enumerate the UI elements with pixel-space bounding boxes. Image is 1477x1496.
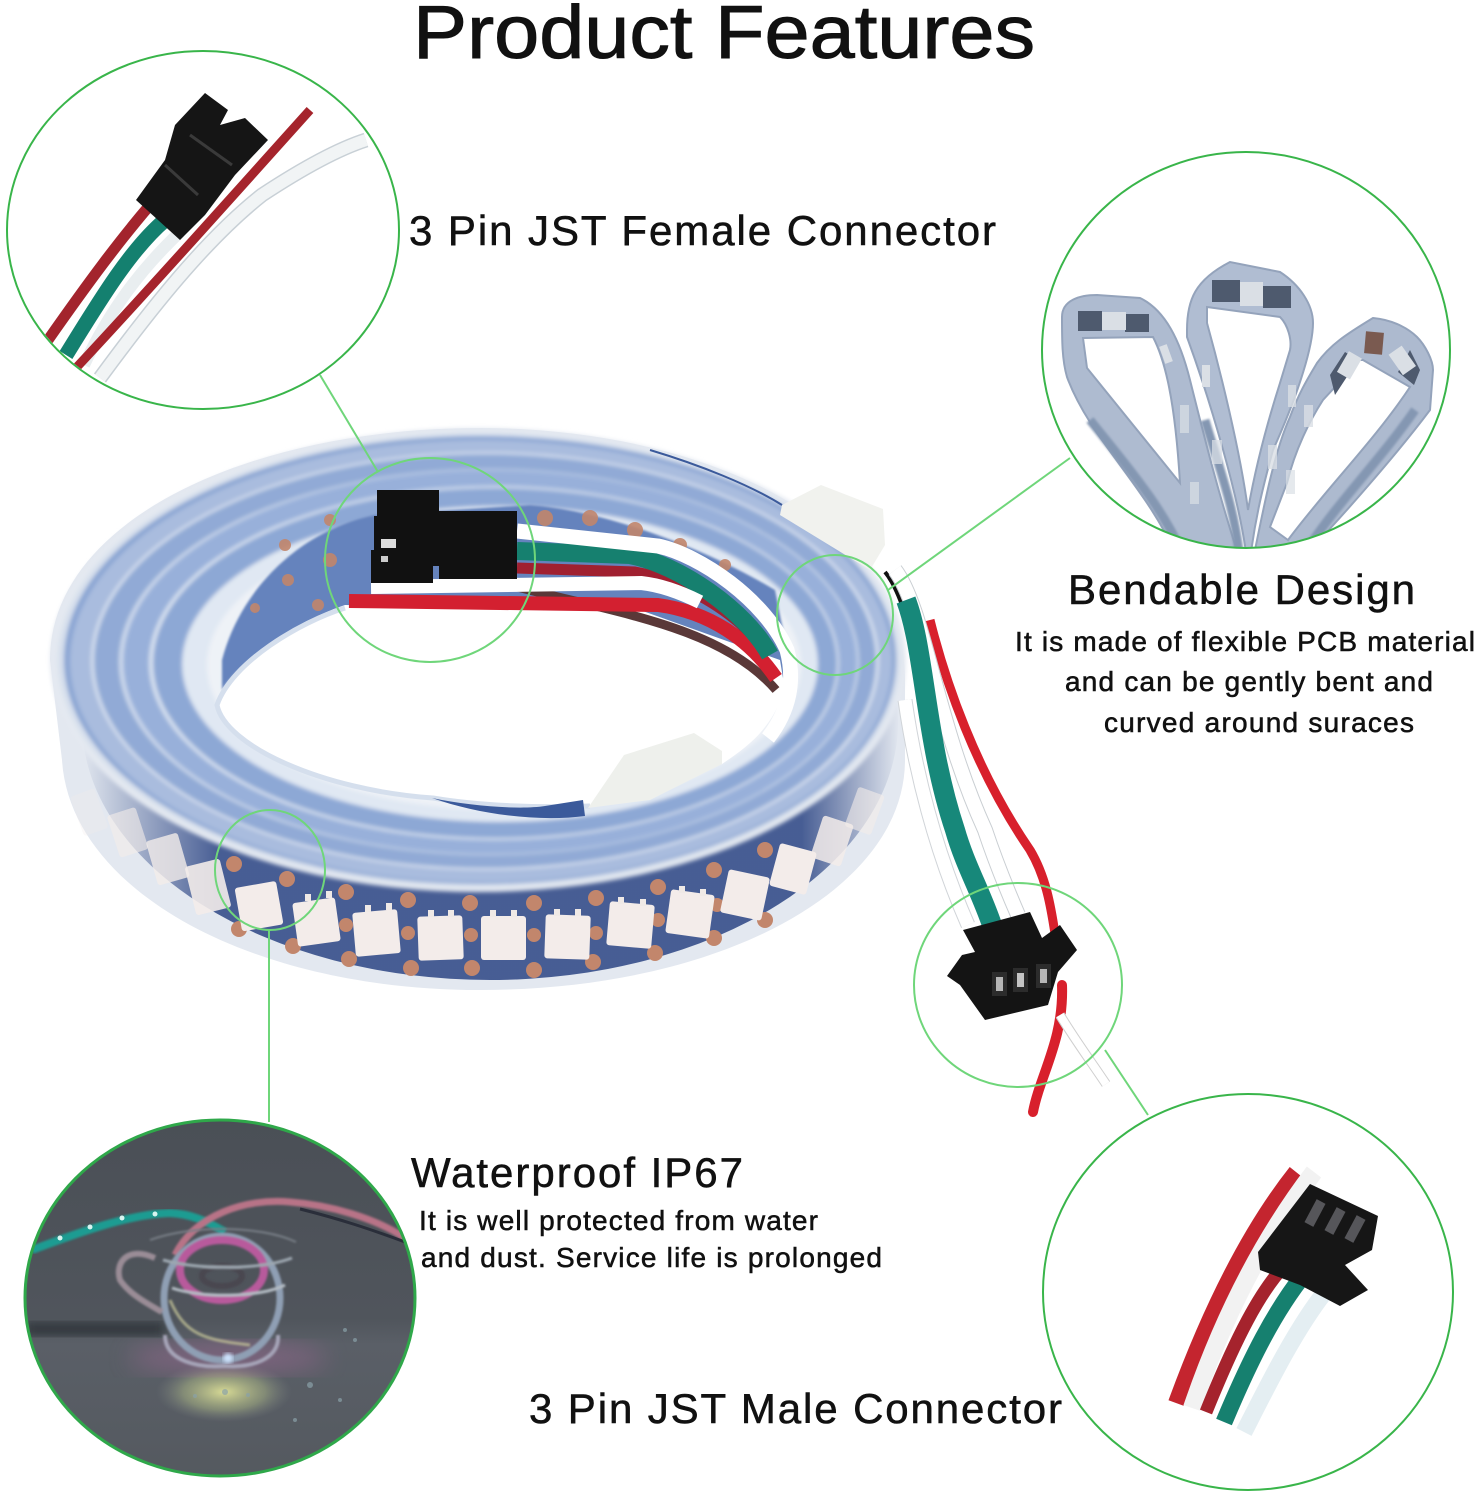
cut strip end bbox=[432, 798, 585, 818]
label: female connector: 3 Pin JST Female Connector bbox=[409, 207, 996, 254]
strip shading bbox=[1090, 410, 1415, 560]
LED chips bbox=[70, 786, 885, 961]
inset: bendable strip loops bbox=[1062, 262, 1433, 560]
callout circles on coil bbox=[215, 458, 1122, 1087]
coil top rings bbox=[50, 428, 906, 892]
coil silicone body bbox=[50, 428, 905, 990]
circle: female connector bbox=[7, 51, 399, 409]
PCB band bbox=[82, 464, 898, 980]
text: bendable description: It is made of flexible PCB material bbox=[1015, 626, 1475, 657]
text: bendable description bbox=[1015, 626, 1475, 738]
text: waterproof description: It is well protected from water bbox=[419, 1205, 818, 1236]
circle: male connector bbox=[1043, 1094, 1453, 1490]
PCB solder dots bbox=[226, 842, 773, 978]
coil inner wall bbox=[222, 505, 795, 690]
cable tail to male connector bbox=[885, 570, 1106, 1112]
white end cap top bbox=[780, 485, 885, 570]
inner silicone rim bbox=[217, 608, 590, 807]
coil hole bbox=[217, 605, 785, 807]
inset: waterproof glass cup bbox=[20, 1115, 420, 1485]
text: waterproof description bbox=[419, 1205, 882, 1273]
inset: male connector bbox=[1176, 1172, 1378, 1432]
circle: waterproof bbox=[25, 1120, 415, 1476]
strip end line top bbox=[650, 450, 782, 505]
wires from female connector bbox=[349, 531, 791, 738]
white end cap bottom bbox=[588, 733, 722, 808]
LED chip details in loops bbox=[1078, 280, 1420, 395]
text: bendable description: and can be gently bent and bbox=[1065, 666, 1433, 697]
circle: bendable design bbox=[1042, 152, 1450, 548]
text: bendable description: curved around suraces bbox=[1104, 707, 1414, 738]
inset: female connector bbox=[48, 93, 366, 378]
heading: bendable design: Bendable Design bbox=[1068, 566, 1415, 613]
PCB dots on inner wall bbox=[250, 510, 731, 613]
label: male connector: 3 Pin JST Male Connector bbox=[529, 1385, 1062, 1432]
female connector on coil bbox=[371, 490, 517, 583]
connector lines bbox=[269, 375, 1148, 1122]
text: waterproof description: and dust. Service life is prolonged bbox=[421, 1242, 882, 1273]
LED leads bbox=[305, 886, 706, 917]
heading: waterproof: Waterproof IP67 bbox=[411, 1149, 743, 1196]
male connector bbox=[947, 912, 1077, 1020]
LED strip coil bbox=[50, 428, 906, 990]
